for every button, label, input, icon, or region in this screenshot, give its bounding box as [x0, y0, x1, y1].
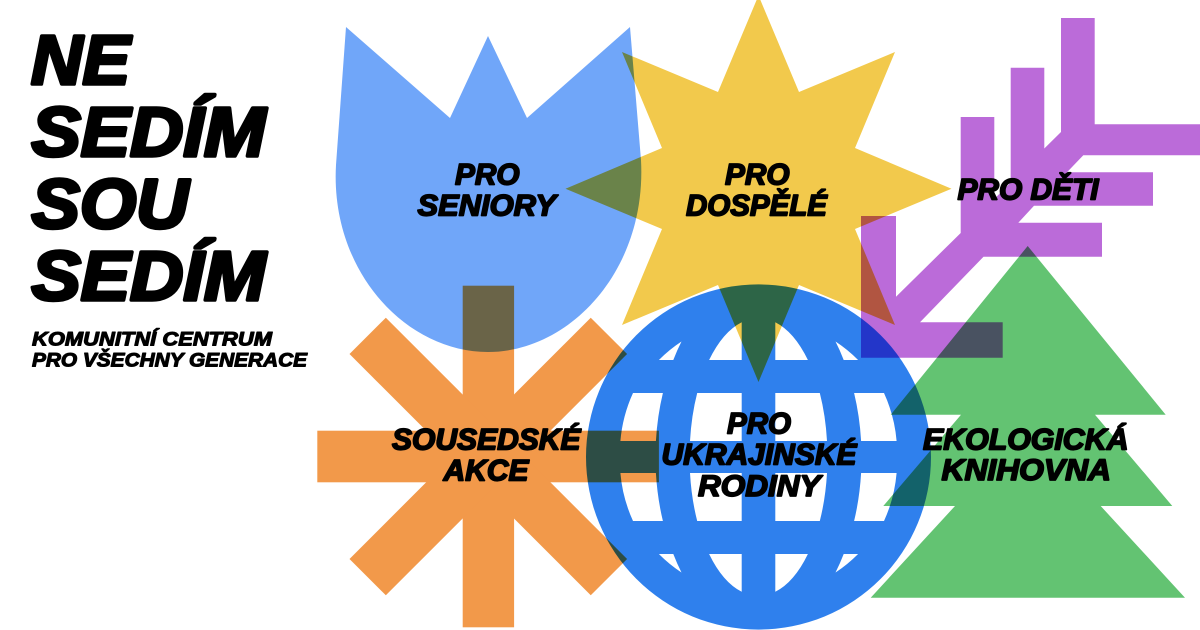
- title: SOU: [32, 165, 190, 243]
- icon: green tree: [871, 246, 1185, 598]
- label: pro seniory: PRO: [455, 158, 520, 191]
- subtitle: KOMUNITNÍ CENTRUM: [32, 328, 273, 351]
- label: ekologická knihovna: KNIHOVNA: [942, 454, 1111, 487]
- icon: yellow star: [566, 0, 952, 382]
- label: pro děti: PRO DĚTI: [958, 172, 1099, 206]
- title: SEDÍM: [32, 93, 267, 171]
- label: pro ukrajinské rodiny: [662, 408, 858, 503]
- subtitle: PRO VŠECHNY GENERACE: [32, 347, 308, 371]
- icon: blue tulip: [336, 27, 641, 352]
- label: pro ukrajinské rodiny: PRO: [727, 408, 791, 441]
- label: sousedské akce: SOUSEDSKÉ: [392, 422, 582, 456]
- label: sousedské akce: AKCE: [442, 454, 530, 487]
- icon: purple snowflake branch: [861, 18, 1200, 358]
- title: SEDÍM: [32, 237, 267, 315]
- label: pro dospělé: [686, 158, 828, 222]
- label: pro dospělé: PRO: [725, 158, 790, 191]
- subtitle: [32, 328, 308, 371]
- icon: orange asterisk: [317, 286, 659, 627]
- label: ekologická knihovna: EKOLOGICKÁ: [923, 422, 1128, 456]
- icon: blue globe: [586, 284, 931, 630]
- title: NE: [31, 21, 132, 99]
- title: [31, 21, 267, 315]
- label: pro ukrajinské rodiny: UKRAJINSKÉ: [662, 438, 858, 472]
- label: sousedské akce: [392, 422, 582, 487]
- label: pro seniory: [418, 158, 558, 222]
- label: ekologická knihovna: [923, 422, 1128, 487]
- label: pro dospělé: DOSPĚLÉ: [686, 188, 828, 222]
- label: pro ukrajinské rodiny: RODINY: [698, 470, 823, 503]
- label: pro seniory: SENIORY: [418, 189, 558, 222]
